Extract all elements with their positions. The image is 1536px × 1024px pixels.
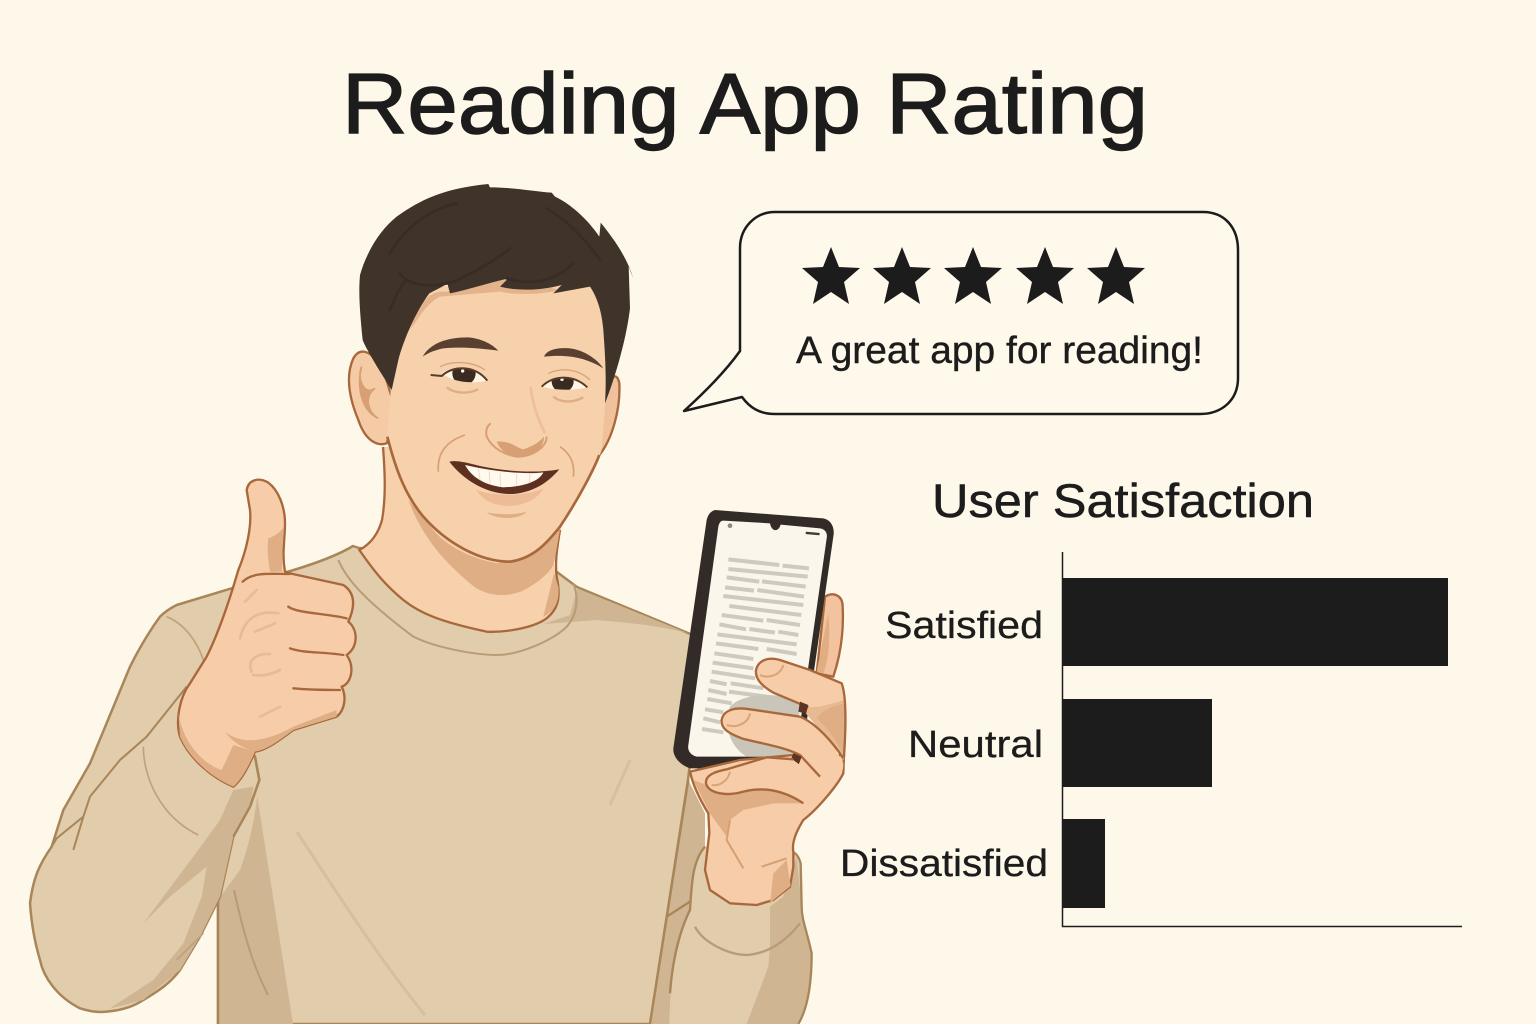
- upper finger: [756, 659, 845, 707]
- shaded gap behind fingers: [800, 697, 845, 760]
- bar: dissatisfied: Dissatisfied: [840, 843, 1048, 885]
- bar: dissatisfied: [840, 819, 1105, 908]
- middle finger: [722, 708, 843, 779]
- phone edge between fingers: [790, 702, 808, 766]
- hair: [359, 184, 633, 403]
- phone body: [673, 510, 834, 768]
- right sleeve cuff: [650, 780, 812, 1024]
- axes: [1062, 552, 1462, 926]
- bar chart: user satisfaction: [840, 474, 1462, 926]
- five stars: [802, 247, 1145, 304]
- cuff outlines: [650, 780, 812, 1024]
- sleeve fold lines: [52, 687, 187, 850]
- smile: [449, 461, 559, 518]
- bar: neutral: [908, 699, 1212, 787]
- fingers: [243, 574, 347, 690]
- neck and collar: [338, 447, 688, 655]
- illustration: man with thumbs up and phone: [30, 184, 845, 1024]
- left ear: [349, 352, 397, 444]
- title: Reading App Rating: [342, 57, 1148, 152]
- right ear: [587, 376, 619, 455]
- head: [349, 184, 633, 562]
- fingernails: [712, 665, 783, 785]
- sweater body: [218, 546, 705, 1024]
- shade between body and sleeve: [650, 780, 705, 1024]
- bubble text: A great app for reading!: [796, 330, 1203, 372]
- bar: satisfied: [885, 578, 1448, 666]
- screen text lines: [702, 559, 809, 732]
- bar: neutral: Neutral: [908, 724, 1043, 766]
- collar outer rib: [338, 560, 577, 655]
- sleeve shading: [110, 787, 253, 1008]
- right shoulder shadow: [543, 588, 688, 633]
- hairline shadow: [410, 278, 560, 330]
- bubble outline: [684, 212, 1238, 414]
- back finger: [817, 594, 843, 677]
- smile lines: [438, 435, 574, 477]
- palm and wrist: [690, 755, 844, 905]
- face: [387, 280, 607, 562]
- bar: satisfied: Satisfied: [885, 605, 1043, 647]
- neck shadow: [408, 500, 560, 595]
- phone screen: [688, 521, 827, 757]
- cuff shade: [747, 857, 812, 1024]
- left arm sleeve: [30, 588, 259, 1012]
- thumb: [706, 757, 807, 803]
- eyebrows: [423, 337, 498, 357]
- under-eye creases: [447, 387, 583, 401]
- hair strands: [390, 203, 600, 310]
- phone-holding hand: [673, 510, 845, 905]
- nose: [531, 387, 545, 433]
- thumbs-up hand: [178, 480, 356, 787]
- finger shadow on screen: [727, 695, 800, 757]
- screen status icons: [728, 523, 820, 535]
- speech bubble: [684, 212, 1238, 414]
- right eye: [542, 370, 590, 392]
- left eye: [431, 362, 487, 385]
- chart heading: User Satisfaction: [932, 474, 1314, 527]
- neck: [359, 447, 563, 632]
- wrist shade: [178, 710, 255, 787]
